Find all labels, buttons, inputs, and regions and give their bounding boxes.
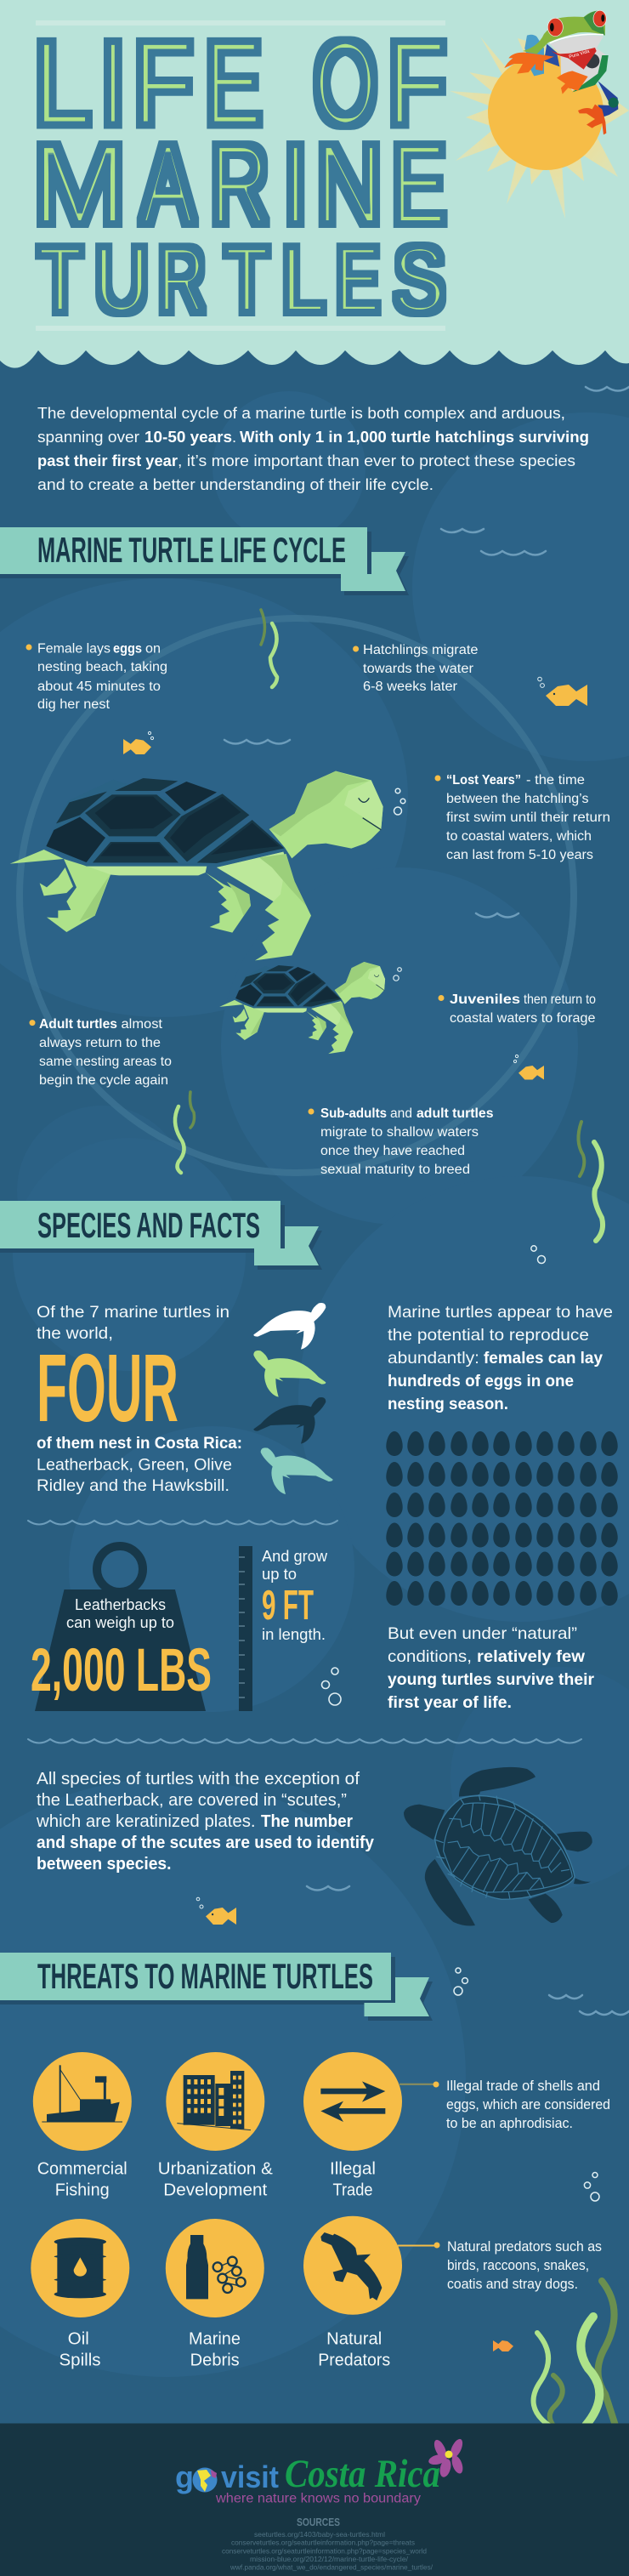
threat: natural predators: Predators xyxy=(318,2351,390,2370)
text: grow up to 9 ft: up to xyxy=(262,1566,297,1583)
bubbles: large turtle xyxy=(394,788,405,815)
text: reproduce abundantly: Marine turtles appear to have xyxy=(388,1303,613,1322)
title: T xyxy=(38,228,82,332)
text: female lays eggs: on xyxy=(145,641,161,657)
text: adult turtles: almost xyxy=(121,1017,163,1032)
title: R xyxy=(211,122,269,247)
text: sub-adults: once they have reached xyxy=(320,1144,465,1158)
threat: illegal trade: Trade xyxy=(333,2181,372,2200)
life cycle ring xyxy=(20,618,574,1173)
threat: illegal trade: Illegal xyxy=(330,2160,376,2179)
threat: illegal trade xyxy=(303,2052,402,2200)
bubbles: scutes fish xyxy=(196,1897,203,1908)
callout: natural predators: coatis and stray dogs. xyxy=(447,2276,578,2292)
text: scutes paragraph: between species. xyxy=(37,1855,172,1874)
title: E xyxy=(337,228,379,332)
banner: marine turtle life cycle xyxy=(0,527,409,595)
banner: marine turtle life cycle: MARINE TURTLE LIFE CYCLE xyxy=(37,530,346,570)
text: lost years: first swim until their return xyxy=(446,810,610,825)
text: of the 7 marine turtles: Ridley and the Hawksbill. xyxy=(37,1476,230,1495)
text: natural conditions: first year of life. xyxy=(388,1693,512,1712)
text: female lays eggs: dig her nest xyxy=(37,697,110,712)
text: scutes paragraph: the Leatherback, are covered in “scutes,” xyxy=(37,1791,347,1810)
title rule bottom xyxy=(36,326,445,331)
text: lost years: between the hatchling’s xyxy=(446,792,589,806)
text: of the 7 marine turtles: Leatherback, Green, Olive xyxy=(37,1456,232,1475)
illustration: sea turtle from above xyxy=(404,1767,592,1925)
text: juveniles: coastal waters to forage xyxy=(450,1011,595,1026)
text: adult turtles: always return to the xyxy=(39,1036,161,1050)
wave divider long xyxy=(28,1739,581,1743)
text: natural conditions: conditions, xyxy=(388,1647,472,1666)
wave squiggles xyxy=(224,387,629,2015)
intro paragraph: spanning over xyxy=(37,428,139,446)
icon: ruler xyxy=(239,1546,252,1711)
text: scutes paragraph: which are keratinized plates. xyxy=(36,1812,256,1831)
sources: wwf.panda.org/what_we_do/endangered_species/marine_turtles/ xyxy=(230,2563,434,2572)
text: of the 7 marine turtles: the world, xyxy=(37,1324,113,1343)
threat: urbanization and development: Development xyxy=(163,2181,268,2200)
title: E xyxy=(392,122,446,247)
text: scutes paragraph xyxy=(36,1770,375,1874)
bubbles: upper left fish xyxy=(148,731,154,740)
text: adult turtles: same nesting areas to xyxy=(39,1055,172,1069)
text: of the 7 marine turtles xyxy=(37,1303,242,1495)
callout: natural predators xyxy=(398,2238,602,2292)
text: lost years: to coastal waters, which xyxy=(446,829,592,844)
text: female lays eggs xyxy=(26,641,167,712)
sources: conserveturtles.org/seaturtleinformation.php?page=threats xyxy=(231,2539,415,2547)
text: female lays eggs: nesting beach, taking xyxy=(37,660,167,674)
icon: weight with leatherback text xyxy=(31,1546,212,1711)
callout: illegal trade xyxy=(400,2078,610,2131)
text: juveniles: then return to xyxy=(524,992,596,1007)
text: female lays eggs: about 45 minutes to xyxy=(37,680,161,694)
text: adult turtles xyxy=(29,1017,172,1088)
text: reproduce abundantly: abundantly: xyxy=(388,1349,479,1368)
intro paragraph: and to create a better understanding of their life cycle. xyxy=(37,475,434,493)
title: A xyxy=(141,122,194,247)
sources: SOURCES xyxy=(297,2516,340,2528)
icons: four turtle silhouettes xyxy=(253,1303,333,1494)
title: T xyxy=(225,228,269,332)
title: L xyxy=(281,228,325,332)
text: grow up to 9 ft: in length. xyxy=(262,1626,326,1643)
icon: weight with leatherback text: 2,000 LBS xyxy=(31,1637,212,1704)
text: scutes paragraph: The number xyxy=(261,1812,353,1831)
text: grow up to 9 ft: And grow xyxy=(262,1548,328,1565)
seaweed: bottom right xyxy=(534,2281,615,2425)
bubbles: species banner xyxy=(531,1246,546,1264)
text: sub-adults: and xyxy=(390,1106,412,1121)
text: natural conditions: young turtles survive their xyxy=(388,1670,594,1689)
text: scutes paragraph: All species of turtles with the exception of xyxy=(37,1770,360,1788)
icon: weight with leatherback text: can weigh up to xyxy=(66,1614,174,1631)
bubbles: upper right fish xyxy=(538,677,544,687)
threat: oil spills xyxy=(31,2219,129,2370)
footer band xyxy=(0,2424,629,2576)
title xyxy=(32,17,446,332)
bubbles: threats banner xyxy=(454,1968,468,1995)
intro paragraph: . xyxy=(232,428,236,446)
title: I xyxy=(100,17,126,150)
text: sub-adults: adult turtles xyxy=(416,1106,493,1121)
fish: upper left xyxy=(123,739,151,754)
callout: illegal trade: Illegal trade of shells and xyxy=(446,2078,600,2094)
text: sub-adults: Sub-adults xyxy=(320,1106,387,1121)
intro paragraph: past their first year xyxy=(37,452,178,469)
title: E xyxy=(205,17,262,150)
threat: commercial fishing xyxy=(33,2052,132,2200)
title: M xyxy=(32,122,127,247)
seaweed: life cycle section xyxy=(175,610,603,1241)
banner: threats to marine turtles xyxy=(0,1953,433,2021)
text: scutes paragraph: and shape of the scutes are used to identify xyxy=(37,1834,375,1852)
text: hatchlings migrate: towards the water xyxy=(363,662,473,676)
banner: species and facts: SPECIES AND FACTS xyxy=(37,1205,260,1245)
text: of the 7 marine turtles: Of the 7 marine turtles in xyxy=(37,1303,230,1322)
intro paragraph: The developmental cycle of a marine turtle is both complex and arduous, xyxy=(37,404,565,422)
text: grow up to 9 ft xyxy=(262,1548,328,1643)
title: N xyxy=(316,122,382,247)
text: of the 7 marine turtles: of them nest in Costa Rica: xyxy=(37,1434,242,1453)
sources xyxy=(222,2516,434,2572)
threat: marine debris xyxy=(166,2219,264,2370)
text: reproduce abundantly xyxy=(388,1303,613,1413)
bubbles: ruler xyxy=(321,1668,341,1705)
illustration: small juvenile turtle xyxy=(219,962,385,1054)
bubbles: threats right xyxy=(584,2172,599,2201)
text: lost years xyxy=(435,773,610,862)
text: female lays eggs: Female lays xyxy=(37,641,110,657)
text: adult turtles: Adult turtles xyxy=(39,1017,117,1032)
fish: lower right xyxy=(518,1066,544,1080)
threat: commercial fishing: Commercial xyxy=(37,2160,128,2179)
wave divider short xyxy=(28,1521,337,1524)
sources: mission-blue.org/2012/12/marine-turtle-life-cycle/ xyxy=(250,2555,409,2563)
banner: species and facts xyxy=(0,1201,322,1270)
threat: natural predators: Natural xyxy=(326,2330,382,2349)
intro paragraph xyxy=(37,404,589,493)
title: O xyxy=(314,17,377,150)
bubbles: lower right fish xyxy=(513,1055,518,1063)
text: sub-adults xyxy=(308,1106,493,1177)
text: lost years: can last from 5-10 years xyxy=(446,848,593,862)
logo: go visit costa rica: Costa Rica xyxy=(285,2452,440,2496)
text: juveniles: Juveniles xyxy=(450,992,520,1007)
callout: natural predators: Natural predators such as xyxy=(447,2238,602,2255)
logo: go visit costa rica: where nature knows no boundary xyxy=(215,2492,421,2506)
text: hatchlings migrate: Hatchlings migrate xyxy=(363,643,478,657)
pictogram: eggs grid xyxy=(386,1431,618,1606)
text: sub-adults: sexual maturity to breed xyxy=(320,1163,470,1177)
background: mint sky xyxy=(0,0,629,425)
title: F xyxy=(388,17,446,150)
threat: urbanization and development: Urbanization & xyxy=(158,2160,273,2179)
threat: marine debris: Debris xyxy=(190,2351,240,2370)
fish: upper right xyxy=(546,685,587,706)
icon: red-eyed tree frog on the sun xyxy=(504,10,619,134)
text: adult turtles: begin the cycle again xyxy=(39,1073,168,1088)
threat: oil spills: Spills xyxy=(60,2351,100,2370)
illustration: large green turtle xyxy=(10,771,383,960)
title: I xyxy=(284,122,308,247)
fish: scutes section xyxy=(206,1908,236,1925)
text: reproduce abundantly: females can lay xyxy=(484,1349,603,1368)
logo: go visit costa rica: visit xyxy=(221,2459,279,2494)
threat: natural predators xyxy=(303,2216,402,2370)
callout: illegal trade: eggs, which are considered xyxy=(446,2096,610,2113)
text: reproduce abundantly: the potential to reproduce xyxy=(388,1326,589,1345)
text: natural conditions xyxy=(388,1624,594,1712)
intro paragraph: With only 1 in 1,000 turtle hatchlings surviving xyxy=(240,428,589,446)
threat: commercial fishing: Fishing xyxy=(55,2181,110,2200)
threat: urbanization and development xyxy=(158,2052,273,2200)
logo: go visit costa rica: g xyxy=(175,2459,194,2494)
callout: natural predators: birds, raccoons, snakes, xyxy=(447,2257,589,2273)
text: lost years: - the time xyxy=(526,773,585,788)
callout: illegal trade: to be an aphrodisiac. xyxy=(446,2115,573,2131)
text: hatchlings migrate: 6-8 weeks later xyxy=(363,680,457,694)
text: reproduce abundantly: hundreds of eggs in one xyxy=(388,1372,574,1390)
title: R xyxy=(158,228,205,332)
icon: red-eyed tree frog on the sun: Pura Vida xyxy=(569,48,591,60)
icon: sun xyxy=(450,37,629,219)
text: grow up to 9 ft: 9 FT xyxy=(262,1583,314,1629)
text: natural conditions: But even under “natural” xyxy=(388,1624,577,1643)
title: F xyxy=(133,17,193,150)
text: juveniles xyxy=(439,992,596,1026)
text: lost years: “Lost Years” xyxy=(446,773,521,788)
text: female lays eggs: eggs xyxy=(113,641,142,657)
icon: weight with leatherback text: Leatherbacks xyxy=(75,1596,166,1613)
sources: conserveturtles.org/seaturtleinformation.php?page=species_world xyxy=(222,2547,427,2556)
text: hatchlings migrate xyxy=(353,643,478,694)
text: sub-adults: migrate to shallow waters xyxy=(320,1125,479,1140)
decorative background circles xyxy=(0,391,629,2377)
logo: go visit costa rica xyxy=(175,2437,465,2506)
text: reproduce abundantly: nesting season. xyxy=(388,1395,508,1413)
fish: orange bottom xyxy=(493,2340,513,2351)
title: U xyxy=(94,228,149,332)
banner: threats to marine turtles: THREATS TO MARINE TURTLES xyxy=(37,1956,373,1996)
text: natural conditions: relatively few xyxy=(477,1647,586,1666)
intro paragraph: 10-50 years xyxy=(144,428,232,446)
sources: seeturtles.org/1403/baby-sea-turtles.html xyxy=(254,2530,385,2539)
intro paragraph: , it’s more important than ever to protect these species xyxy=(178,452,575,469)
title: L xyxy=(33,17,91,150)
threat: marine debris: Marine xyxy=(189,2330,241,2349)
bubbles: small turtle xyxy=(394,968,401,981)
text: of the 7 marine turtles: FOUR xyxy=(37,1334,178,1442)
threat: oil spills: Oil xyxy=(68,2330,89,2349)
title rule top xyxy=(36,20,445,26)
title: S xyxy=(394,228,445,332)
